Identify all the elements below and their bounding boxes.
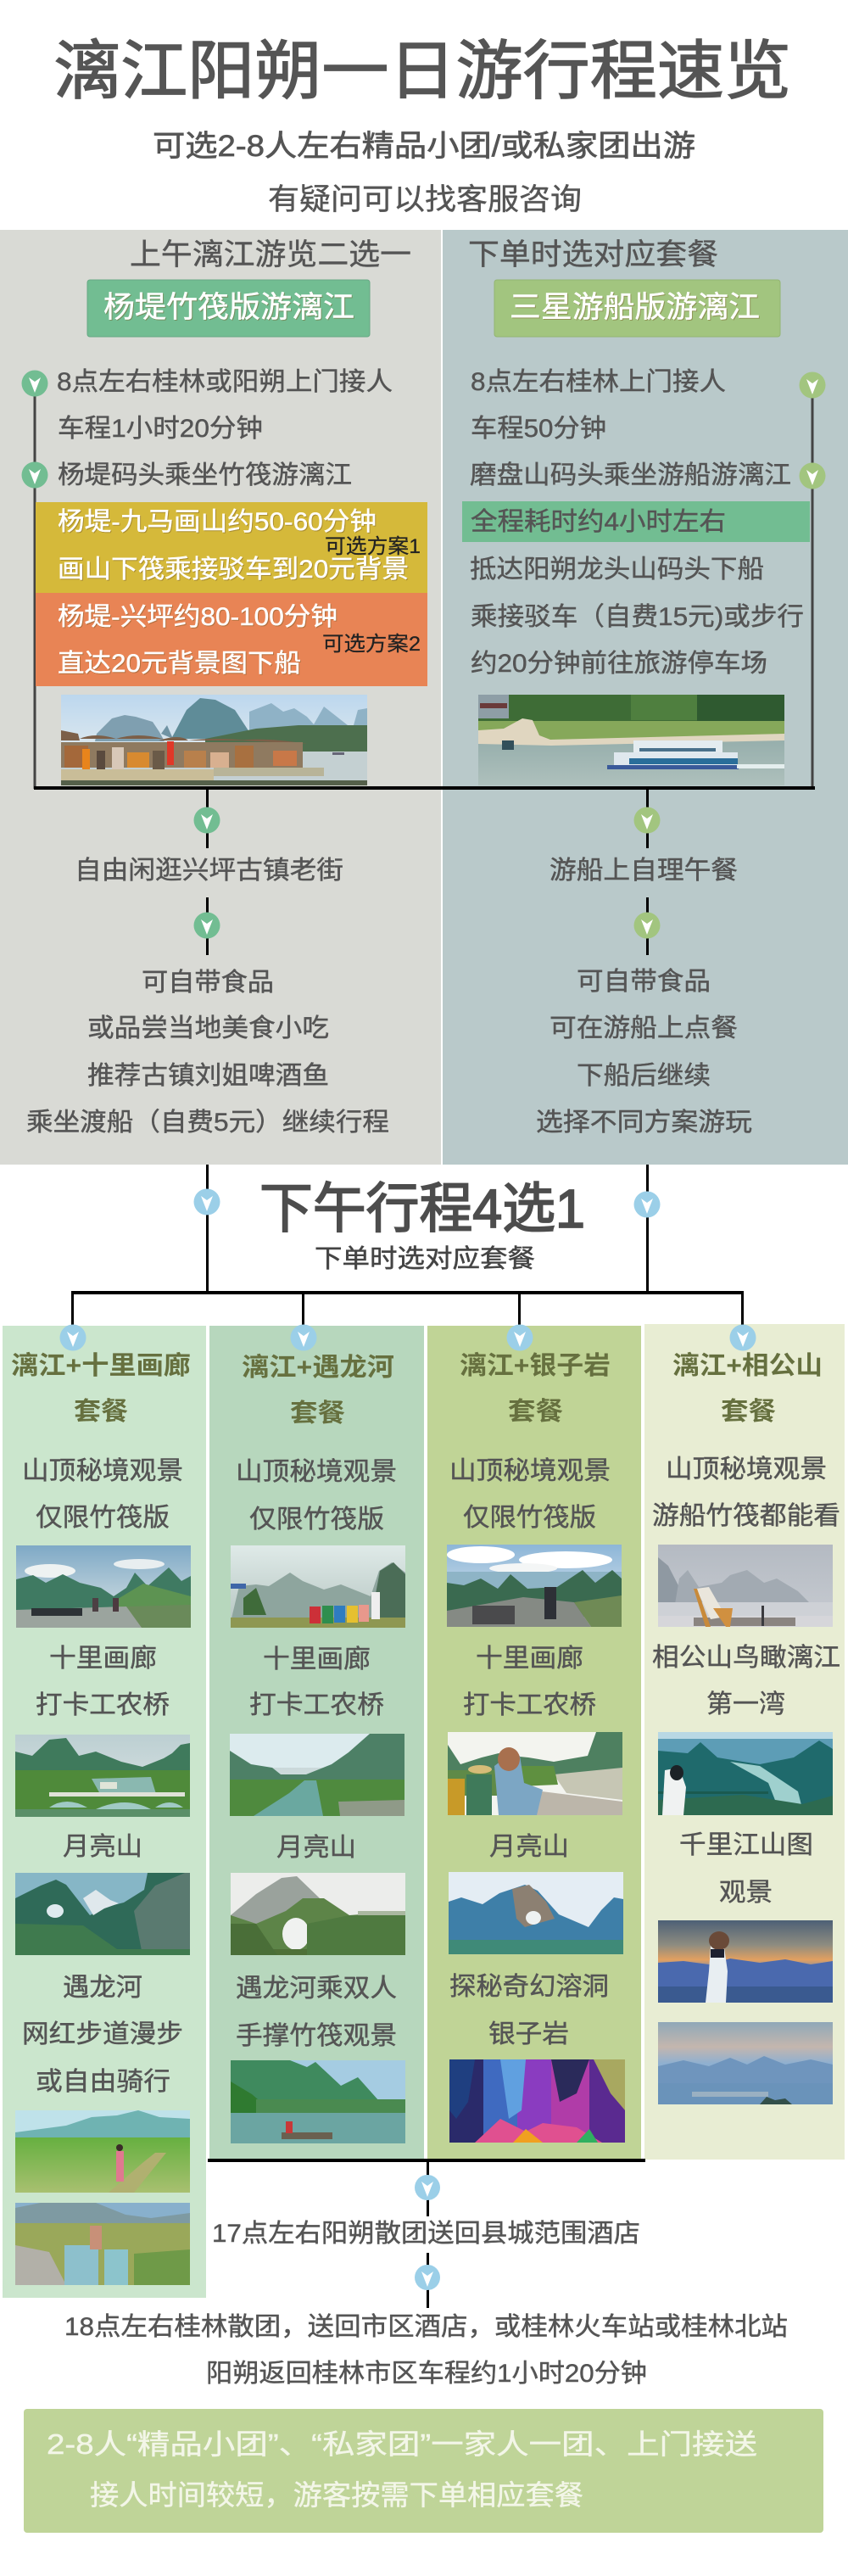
heading: package 3: 套餐	[508, 1398, 563, 1426]
photo: bamboo rafts	[61, 695, 367, 785]
callout: option 2: 直达20元背景图下船	[58, 650, 301, 678]
icon: left arrow 1	[22, 370, 47, 397]
connector: return line 2	[427, 2253, 429, 2308]
text: gallery road	[36, 1645, 170, 1719]
text: right drive time: 车程50分钟	[471, 415, 606, 443]
icon: return arrow 2	[415, 2265, 440, 2290]
text: bird's-eye: 第一湾	[706, 1690, 785, 1718]
text: summit view	[449, 1457, 611, 1532]
panel: morning raft option	[0, 230, 441, 1165]
callout: option 1: 画山下筏乘接驳车到20元背景	[58, 556, 409, 584]
photo: cruise boat	[478, 695, 784, 785]
heading: package 4	[672, 1352, 823, 1426]
icon: left arrow 4	[193, 913, 220, 938]
text: summit view: 山顶秘境观景	[236, 1458, 397, 1486]
text: left drive time: 车程1小时20分钟	[58, 415, 263, 443]
photo: misty deck chair	[658, 1545, 833, 1627]
photo: bamboo raft river	[231, 2060, 405, 2143]
photo: misty peaks	[658, 2022, 833, 2104]
text: left pickup: 8点左右桂林或阳朔上门接人	[57, 368, 393, 396]
text: gallery road: 打卡工农桥	[463, 1691, 596, 1719]
heading: package 1: 套餐	[74, 1398, 128, 1426]
heading: package 4: 漓江+相公山	[672, 1352, 823, 1380]
timeline: morning left line	[34, 394, 36, 789]
text: left boarding: 杨堤码头乘坐竹筏游漓江	[58, 461, 352, 489]
text: boat lunch: 游船上自理午餐	[550, 857, 738, 885]
icon: right arrow 3	[634, 807, 660, 833]
heading: package 1	[11, 1352, 191, 1426]
badge: cruise version	[494, 280, 780, 337]
text: summit view	[652, 1456, 840, 1530]
text: right pickup: 8点左右桂林上门接人	[471, 368, 726, 396]
text block: right lunch tips: 可在游船上点餐	[550, 1014, 738, 1042]
heading: package 2	[242, 1354, 394, 1428]
callout: bottom note: 2-8人“精品小团”、“私家团”一家人一团、上门接送	[47, 2428, 757, 2460]
connector: afternoon rail	[71, 1291, 744, 1294]
heading: package 3	[460, 1352, 611, 1426]
text: summit view: 山顶秘境观景	[449, 1457, 611, 1485]
text: landscape view	[679, 1831, 813, 1907]
photo: river valley	[230, 1734, 404, 1816]
text block: right lunch tips: 下船后继续	[577, 1062, 711, 1090]
text: summit view: 游船竹筏都能看	[652, 1502, 840, 1530]
photo: moon hill in mist	[231, 1873, 405, 1955]
text: cave	[449, 1973, 609, 2048]
text block: right lunch tips: 可自带食品	[577, 968, 711, 996]
text: gallery road	[463, 1645, 596, 1719]
text block: right lunch tips	[536, 968, 752, 1137]
callout: option 1: 杨堤-九马画山约50-60分钟	[58, 508, 377, 536]
title: 漓江阳朔一日游行程速览	[53, 36, 791, 108]
text: summit view	[236, 1458, 397, 1534]
connector: package drop 1	[71, 1293, 74, 1327]
photo: silver cave	[449, 2059, 625, 2143]
connector: package drop 2	[302, 1293, 304, 1327]
text: summit view: 仅限竹筏版	[36, 1504, 170, 1532]
badge: raft version: 杨堤竹筏版游漓江	[103, 291, 354, 324]
heading: package 2: 套餐	[290, 1400, 345, 1428]
icon: right arrow 2	[799, 463, 826, 489]
photo: rice field walk	[15, 2110, 190, 2193]
photo: sunset viewer	[658, 1920, 833, 2003]
connector: morning rail	[34, 786, 815, 790]
text: shuttle: 乘接驳车（自费15元)或步行	[471, 603, 804, 631]
icon: left arrow 2	[22, 461, 47, 489]
connector: package drop 4	[741, 1293, 744, 1327]
connector: bottom rail	[208, 2159, 645, 2162]
subtitle: group size: 可选2-8人左右精品小团/或私家团出游	[153, 130, 695, 163]
text: landscape view: 千里江山图	[679, 1831, 813, 1859]
text: summit view: 仅限竹筏版	[463, 1504, 596, 1532]
text block: left lunch tips: 可自带食品	[142, 969, 274, 997]
text: gallery road: 打卡工农桥	[36, 1691, 170, 1719]
text: cave: 探秘奇幻溶洞	[449, 1973, 609, 2001]
text: arrival: 抵达阳朔龙头山码头下船	[470, 556, 764, 584]
text: river raft: 手撑竹筏观景	[236, 2022, 397, 2050]
callout: option 2	[36, 593, 427, 686]
panel: morning cruise option	[443, 230, 848, 1165]
text: moon hill: 月亮山	[63, 1833, 142, 1861]
heading: package 3: 漓江+银子岩	[460, 1352, 611, 1380]
text block: right lunch tips: 选择不同方案游玩	[536, 1109, 752, 1137]
text: gallery road: 打卡工农桥	[249, 1691, 384, 1719]
heading: package 1: 漓江+十里画廊	[11, 1352, 191, 1380]
text block: left lunch tips	[26, 969, 389, 1137]
text: moon hill: 月亮山	[276, 1834, 356, 1862]
photo: moon hill blue sky	[15, 1873, 190, 1955]
connector: right drop 3	[646, 1165, 649, 1293]
panel: package 1	[3, 1326, 206, 2298]
text: gallery road	[249, 1646, 384, 1719]
heading: morning choice: 上午漓江游览二选一	[130, 238, 411, 271]
text: river raft	[236, 1975, 397, 2050]
text: yulong river: 或自由骑行	[36, 2068, 170, 2096]
callout: bottom note: 接人时间较短，游客按需下单相应套餐	[90, 2479, 583, 2511]
text: walk: 约20分钟前往旅游停车场	[471, 650, 767, 678]
text: bird's-eye	[652, 1644, 840, 1718]
connector: package drop 3	[518, 1293, 521, 1327]
text: yulong river: 遇龙河	[63, 1974, 142, 2002]
text: return time: 阳朔返回桂林市区车程约1小时20分钟	[206, 2360, 647, 2388]
icon: right blue arrow	[634, 1191, 660, 1218]
photo: first bend of the Li	[658, 1732, 833, 1815]
text: gallery road: 十里画廊	[263, 1646, 371, 1674]
icon: return arrow 1	[415, 2175, 440, 2200]
panel: package 2	[209, 1326, 424, 2159]
text: summit view: 山顶秘境观景	[22, 1457, 183, 1485]
text: cave: 银子岩	[488, 2020, 569, 2048]
text block: left lunch tips: 推荐古镇刘姐啤酒鱼	[87, 1062, 329, 1090]
icon: package arrow 2	[290, 1325, 317, 1350]
connector: right drop 2	[646, 897, 649, 955]
heading: package 2: 漓江+遇龙河	[242, 1354, 394, 1382]
panel: package 4	[644, 1324, 845, 2160]
photo: woman at bridge	[448, 1732, 622, 1815]
text: landscape view: 观景	[719, 1879, 773, 1907]
connector: left drop 2	[206, 897, 209, 955]
text block: left lunch tips: 或品尝当地美食小吃	[87, 1014, 329, 1042]
timeline: morning right line	[811, 394, 814, 789]
callout: option 2: 可选方案2	[322, 633, 421, 656]
heading: order note: 下单时选对应套餐	[468, 238, 718, 271]
text: moon hill: 月亮山	[489, 1833, 569, 1861]
text: summit view: 山顶秘境观景	[666, 1456, 827, 1484]
photo: foggy summit lawn	[231, 1545, 405, 1628]
connector: left drop 1	[206, 790, 209, 848]
icon: package arrow 4	[729, 1325, 756, 1350]
photo: scooter ride	[15, 2203, 190, 2285]
connector: left drop 3	[206, 1165, 209, 1293]
callout: option 2: 杨堤-兴坪约80-100分钟	[58, 603, 338, 631]
callout: bottom note	[24, 2409, 823, 2533]
photo: summit deck	[16, 1545, 191, 1628]
photo: gongnong bridge	[15, 1735, 190, 1817]
icon: left arrow 3	[193, 807, 220, 833]
subheading: order note: 下单时选对应套餐	[315, 1245, 535, 1273]
heading: package 4: 套餐	[721, 1398, 776, 1426]
panel: package 3	[427, 1326, 641, 2159]
text: gallery road: 十里画廊	[49, 1645, 157, 1673]
connector: return line 1	[427, 2162, 429, 2216]
text: summit view: 仅限竹筏版	[249, 1506, 384, 1534]
subtitle: contact: 有疑问可以找客服咨询	[268, 183, 582, 216]
text: summit view	[22, 1457, 183, 1532]
text: gallery road: 十里画廊	[476, 1645, 583, 1673]
text block: left lunch tips: 乘坐渡船（自费5元）继续行程	[26, 1109, 389, 1137]
icon: right arrow 4	[634, 913, 660, 938]
icon: right arrow 1	[799, 372, 826, 399]
heading: afternoon choice: 下午行程4选1	[259, 1178, 585, 1239]
text: yulong river: 网红步道漫步	[22, 2020, 183, 2048]
icon: package arrow 1	[59, 1325, 86, 1350]
photo: cloudy summit deck	[447, 1545, 622, 1627]
badge: raft version	[87, 280, 370, 337]
photo: moon hill blue	[449, 1872, 623, 1954]
icon: package arrow 3	[507, 1325, 533, 1350]
callout: full duration	[462, 501, 810, 542]
connector: right drop 1	[646, 790, 649, 848]
text: yangshuo drop-off: 17点左右阳朔散团送回县城范围酒店	[212, 2220, 640, 2248]
callout: option 1: 可选方案1	[325, 535, 421, 558]
badge: cruise version: 三星游船版游漓江	[510, 291, 760, 324]
text: yulong river	[22, 1974, 183, 2096]
callout: full duration: 全程耗时约4小时左右	[471, 508, 726, 536]
callout: option 1	[36, 502, 427, 593]
icon: left blue arrow	[193, 1189, 220, 1215]
text: river raft: 遇龙河乘双人	[236, 1975, 397, 2003]
text: bird's-eye: 相公山鸟瞰漓江	[652, 1644, 840, 1672]
text: old street: 自由闲逛兴坪古镇老街	[75, 857, 343, 885]
text: right boarding: 磨盘山码头乘坐游船游漓江	[470, 461, 791, 489]
text: guilin drop-off: 18点左右桂林散团，送回市区酒店，或桂林火车站或桂林北站	[64, 2313, 788, 2341]
